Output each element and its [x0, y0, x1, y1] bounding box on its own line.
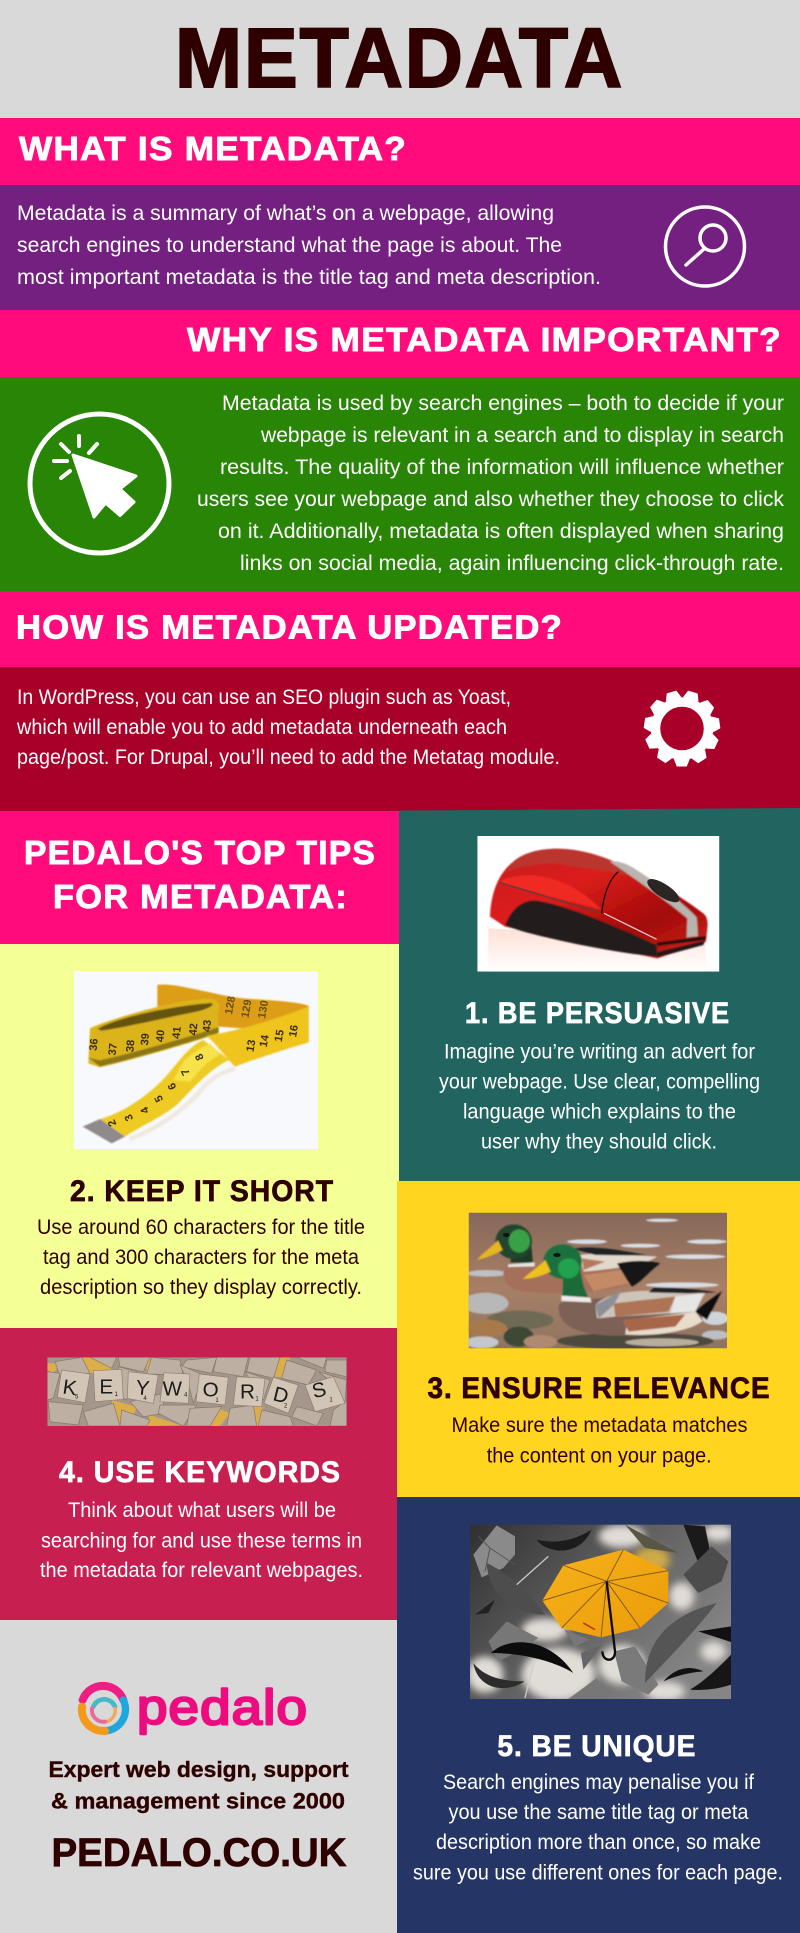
logo wordmark: pedalo	[137, 1681, 308, 1735]
text: be unique	[413, 1770, 783, 1884]
panel: tip 1 be persuasive	[399, 808, 800, 1181]
text: ensure relevance	[452, 1413, 748, 1468]
photo: scrabble tiles spelling keywords: K	[61, 1376, 78, 1400]
photo: measuring tape: 3	[123, 1112, 136, 1123]
text: be persuasive: user why they should click.	[481, 1130, 717, 1154]
photo: two mallard ducks	[462, 1213, 729, 1349]
photo: scrabble tiles spelling keywords: 1	[255, 1397, 259, 1403]
text: be unique: description more than once, so make	[436, 1830, 761, 1854]
text: what is metadata: Metadata is a summary of what’s on a webpage, allowing	[17, 201, 554, 225]
photo: yellow umbrella among grey umbrellas	[467, 1525, 733, 1701]
tagline	[48, 1757, 349, 1814]
photo: measuring tape: 37	[107, 1043, 120, 1056]
text: why is metadata important: webpage is relevant in a search and to display in search	[260, 423, 784, 447]
photo: scrabble tiles spelling keywords: 2	[284, 1403, 288, 1409]
photo: scrabble tiles spelling keywords: 5	[75, 1394, 79, 1400]
water ripples	[462, 1219, 729, 1349]
text: keep it short: tag and 300 characters for the meta	[43, 1245, 359, 1269]
heading: what is metadata: WHAT IS METADATA?	[19, 131, 407, 168]
text: be persuasive: Imagine you’re writing an advert for	[444, 1040, 755, 1064]
text: how is metadata updated	[16, 685, 560, 769]
photo: scrabble tiles spelling keywords: 1	[329, 1398, 333, 1404]
text: ensure relevance: Make sure the metadata matches	[452, 1413, 748, 1437]
photo: measuring tape: 40	[154, 1029, 167, 1043]
photo: scrabble tiles spelling keywords: D	[271, 1383, 291, 1408]
photo: measuring tape: 42	[187, 1023, 200, 1036]
panel: tip 5 be unique	[397, 1497, 800, 1933]
tagline: Expert web design, support	[48, 1757, 349, 1782]
photo: measuring tape: 130	[256, 999, 271, 1020]
text: use keywords: searching for and use these terms in	[41, 1528, 362, 1552]
tagline: & management since 2000	[51, 1789, 345, 1814]
photo: measuring tape: 4	[138, 1104, 152, 1115]
photo: scrabble tiles spelling keywords: 4	[143, 1396, 147, 1402]
photo: scrabble tiles spelling keywords	[47, 1357, 347, 1426]
photo: measuring tape: 13	[244, 1039, 258, 1053]
text: why is metadata important: Metadata is used by search engines – both to decide if your	[222, 391, 784, 415]
text: ensure relevance: the content on your page.	[487, 1444, 712, 1468]
photo: scrabble tiles spelling keywords: R	[240, 1380, 255, 1403]
photo: scrabble tiles spelling keywords: O	[203, 1379, 219, 1402]
text: why is metadata important	[197, 391, 784, 575]
photo: measuring tape: 16	[287, 1024, 301, 1038]
photo: measuring tape: 15	[273, 1029, 287, 1043]
photo: measuring tape: 5	[153, 1093, 166, 1104]
text: be unique: Search engines may penalise you if	[443, 1770, 754, 1794]
panel: tip 3 ensure relevance	[397, 1181, 800, 1497]
panel: what is metadata	[0, 118, 800, 310]
photo: scrabble tiles spelling keywords: S	[310, 1378, 329, 1403]
panel: why is metadata important	[0, 310, 800, 591]
photo: measuring tape: 39	[139, 1033, 152, 1046]
photo: measuring tape: 36	[88, 1038, 101, 1051]
panel: tip 4 use keywords	[0, 1328, 397, 1620]
photo: measuring tape: 128	[223, 995, 238, 1016]
back duck	[477, 1224, 660, 1293]
text: what is metadata: search engines to understand what the page is about. The	[17, 233, 562, 257]
text: how is metadata updated: In WordPress, you can use an SEO plugin such as Yoast,	[17, 685, 511, 709]
photo: scrabble tiles spelling keywords: 1	[215, 1398, 219, 1404]
text: use keywords: Think about what users will be	[68, 1498, 336, 1522]
text: why is metadata important: results. The quality of the information will influence whether	[220, 455, 784, 479]
text: use keywords	[40, 1498, 363, 1582]
photo: measuring tape: 7	[179, 1067, 193, 1077]
panel: how is metadata updated	[0, 591, 800, 811]
photo: measuring tape: 129	[239, 999, 254, 1019]
photo: scrabble tiles spelling keywords: E	[99, 1375, 113, 1398]
title: METADATA	[175, 11, 624, 105]
photo: measuring tape: 8	[193, 1052, 207, 1062]
panel: top tips heading: FOR METADATA:	[53, 879, 348, 916]
text: be persuasive	[439, 1040, 760, 1154]
text: how is metadata updated: page/post. For Drupal, you’ll need to add the Metatag module.	[17, 745, 560, 769]
icon: pedalo swirl logo	[82, 1686, 125, 1731]
photo: scrabble tiles spelling keywords: Y	[134, 1376, 151, 1400]
photo: measuring tape: 38	[124, 1039, 137, 1053]
text: why is metadata important: users see your webpage and also whether they choose to click	[197, 487, 784, 511]
text: use keywords: the metadata for relevant webpages.	[40, 1558, 363, 1582]
photo: measuring tape: 41	[171, 1026, 184, 1039]
heading: ensure relevance: 3. ENSURE RELEVANCE	[428, 1372, 770, 1405]
photo: measuring tape: 14	[258, 1033, 272, 1048]
text: keep it short: Use around 60 characters for the title	[37, 1215, 365, 1239]
text: how is metadata updated: which will enable you to add metadata underneath each	[16, 715, 507, 739]
heading: be persuasive: 1. BE PERSUASIVE	[465, 997, 730, 1030]
front duck	[523, 1244, 722, 1336]
photo: red computer mouse	[477, 836, 719, 972]
icon: cursor click	[30, 414, 169, 553]
photo: measuring tape: 6	[166, 1081, 179, 1091]
heading: be unique: 5. BE UNIQUE	[497, 1730, 696, 1763]
text: keep it short: description so they display correctly.	[40, 1275, 362, 1299]
panel: top tips heading: PEDALO'S TOP TIPS	[24, 835, 376, 872]
heading: why is metadata important: WHY IS METADATA IMPORTANT?	[187, 322, 782, 359]
heading: keep it short: 2. KEEP IT SHORT	[70, 1175, 334, 1208]
text: what is metadata: most important metadata is the title tag and meta description.	[17, 265, 601, 289]
website url: PEDALO.CO.UK	[52, 1831, 347, 1875]
text: why is metadata important: links on social media, again influencing click-through rate.	[240, 551, 784, 575]
panel: top tips heading	[0, 811, 399, 944]
icon: gear	[643, 690, 721, 767]
text: why is metadata important: on it. Additionally, metadata is often displayed when sharing	[218, 519, 784, 543]
photo: measuring tape: 43	[201, 1019, 214, 1033]
panel: pedalo footer	[0, 1620, 397, 1933]
photo: measuring tape: 2	[106, 1118, 119, 1128]
photo: scrabble tiles spelling keywords: 4	[184, 1393, 188, 1399]
text: what is metadata	[17, 201, 601, 289]
text: be persuasive: your webpage. Use clear, compelling	[439, 1070, 760, 1094]
heading: how is metadata updated: HOW IS METADATA UPDATED?	[16, 610, 563, 646]
text: be persuasive: language which explains to the	[463, 1100, 736, 1124]
icon: magnifying glass	[666, 207, 744, 286]
heading: use keywords: 4. USE KEYWORDS	[59, 1456, 341, 1489]
text: keep it short	[37, 1215, 365, 1299]
text: be unique: you use the same title tag or meta	[448, 1800, 749, 1824]
photo: measuring tape	[74, 971, 318, 1149]
panel: tip 2 keep it short	[0, 944, 399, 1328]
photo: scrabble tiles spelling keywords: W	[163, 1377, 182, 1400]
photo: scrabble tiles spelling keywords: 1	[115, 1392, 119, 1398]
